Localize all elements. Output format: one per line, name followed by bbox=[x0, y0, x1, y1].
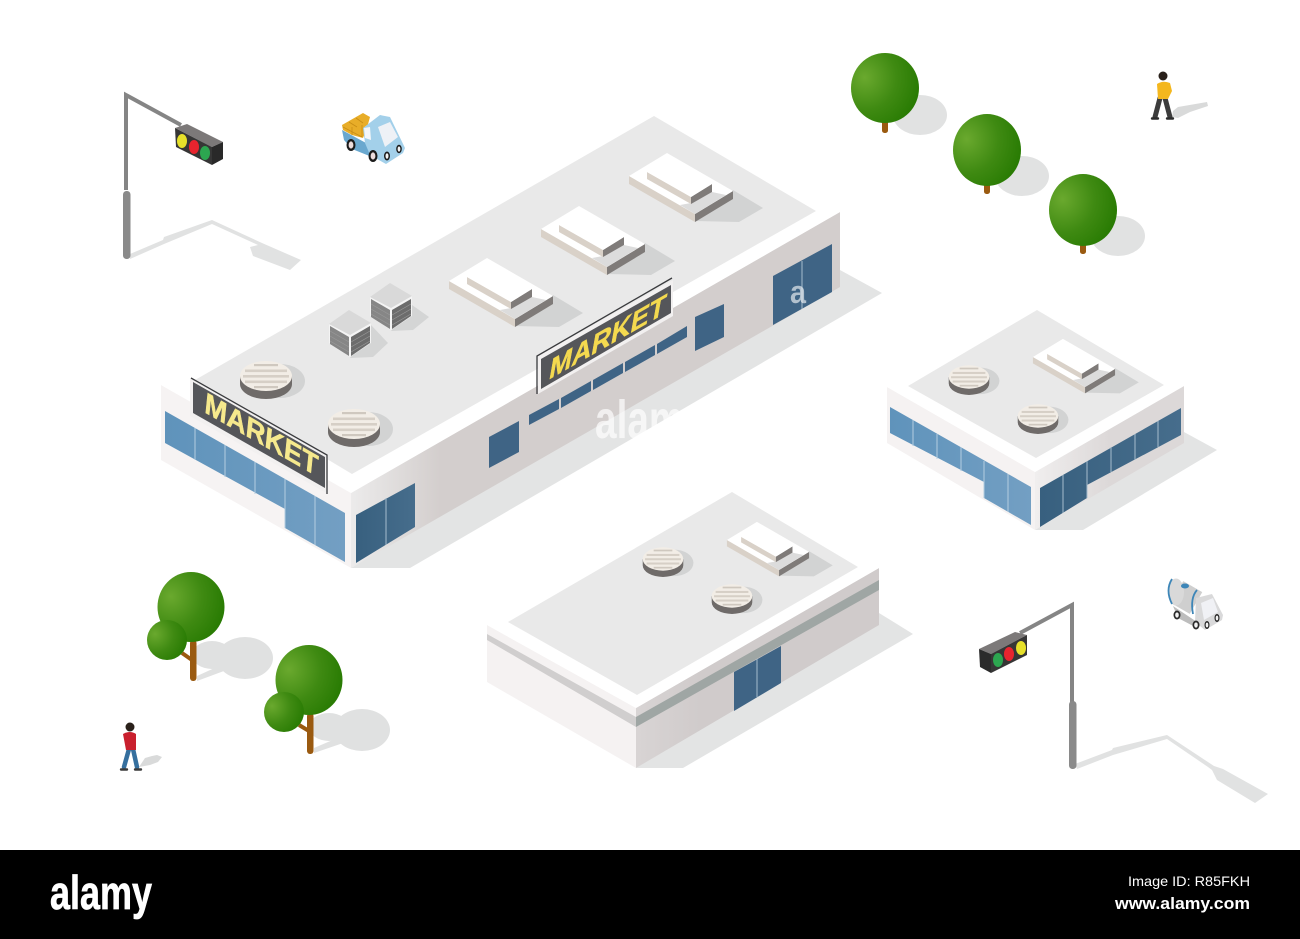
shadow bbox=[1172, 102, 1208, 118]
skylight bbox=[1033, 339, 1139, 393]
torso bbox=[1157, 82, 1172, 99]
ground shadow bbox=[351, 270, 882, 568]
alamy logo: alamy bbox=[50, 866, 152, 919]
right wall bbox=[636, 568, 879, 768]
tanker truck bbox=[1168, 578, 1223, 630]
ground shadow bbox=[636, 613, 913, 768]
wide flat building bottom bbox=[487, 492, 913, 768]
side window bbox=[695, 304, 724, 351]
side door bbox=[773, 244, 832, 325]
traffic light top left bbox=[123, 95, 301, 270]
AC units bbox=[329, 283, 429, 358]
watermark on building bbox=[595, 274, 806, 450]
shoes bbox=[121, 768, 141, 771]
chassis bbox=[1173, 606, 1197, 628]
ground shadow bbox=[1035, 432, 1217, 530]
roof vents bbox=[643, 547, 762, 614]
top right trees bbox=[851, 53, 1145, 256]
right windows bbox=[1040, 408, 1181, 527]
tree three bbox=[1049, 174, 1145, 256]
cab bbox=[1195, 594, 1223, 630]
shoes bbox=[1152, 117, 1173, 120]
shadow bbox=[139, 755, 162, 767]
pole shadow bbox=[1075, 735, 1268, 803]
pole shadow bbox=[130, 220, 301, 270]
roof surface bbox=[908, 310, 1164, 458]
main market building bbox=[161, 116, 882, 568]
tree one bbox=[851, 53, 947, 135]
door bbox=[734, 646, 781, 711]
wall window bbox=[489, 421, 519, 468]
legs bbox=[1155, 98, 1170, 117]
roof edge bbox=[487, 492, 879, 708]
tank bands bbox=[1168, 579, 1197, 614]
torso bbox=[123, 732, 136, 750]
wheels bbox=[1174, 610, 1220, 630]
tank bbox=[1177, 592, 1196, 603]
roof edge bbox=[887, 310, 1184, 472]
left wall bbox=[887, 387, 1035, 530]
storefront windows bbox=[165, 411, 345, 562]
truck bed bbox=[342, 130, 372, 157]
market sign right: MARKET bbox=[547, 287, 669, 386]
cargo boxes bbox=[342, 113, 370, 138]
bottom left trees bbox=[147, 572, 390, 754]
roof surface bbox=[195, 116, 816, 474]
pole and arm bbox=[126, 95, 181, 190]
roof edge bbox=[161, 116, 840, 493]
market sign left: MARKET bbox=[203, 386, 320, 483]
pedestrian red shirt bbox=[121, 722, 162, 770]
wheels bbox=[346, 139, 402, 162]
roof vents bbox=[949, 365, 1068, 434]
corner door bbox=[356, 483, 415, 563]
left wall bbox=[161, 385, 351, 568]
right wall bbox=[351, 212, 840, 568]
left band bbox=[487, 634, 636, 727]
small flat building right bbox=[887, 310, 1217, 530]
right wall bbox=[1035, 386, 1184, 530]
head bbox=[126, 722, 134, 732]
strip windows bbox=[529, 326, 687, 425]
right band bbox=[636, 580, 879, 727]
roof surface bbox=[508, 492, 858, 695]
signal box bbox=[175, 124, 223, 165]
left wall bbox=[487, 625, 636, 768]
image id: Image ID: R85FKH bbox=[1128, 873, 1250, 889]
legs bbox=[124, 749, 137, 767]
website: www.alamy.com bbox=[1114, 894, 1250, 913]
watermark on building: alamy bbox=[595, 390, 705, 450]
tree two bbox=[953, 114, 1049, 196]
skylight bbox=[727, 522, 833, 576]
truck cab bbox=[363, 115, 405, 164]
pedestrian yellow shirt bbox=[1152, 72, 1208, 118]
tree B bbox=[264, 645, 390, 754]
footer bar bbox=[0, 850, 1300, 939]
pole and arm bbox=[1020, 605, 1072, 703]
traffic light bottom right bbox=[979, 605, 1268, 803]
tree A bbox=[147, 572, 273, 681]
roof vents bbox=[240, 361, 393, 447]
left windows bbox=[890, 407, 1031, 525]
skylights bbox=[449, 153, 763, 327]
delivery truck bbox=[342, 113, 405, 164]
watermark on building: a bbox=[790, 274, 806, 310]
signal box bbox=[979, 632, 1027, 673]
head bbox=[1158, 72, 1168, 80]
